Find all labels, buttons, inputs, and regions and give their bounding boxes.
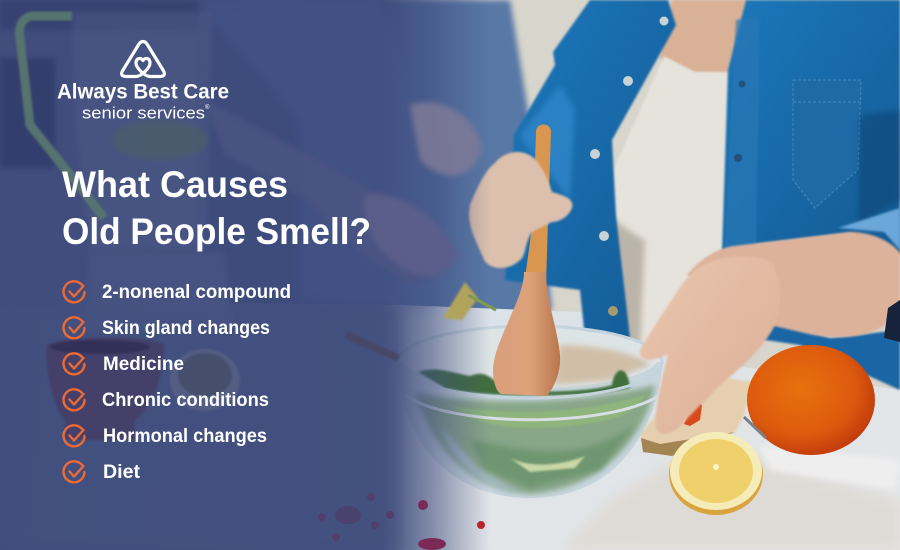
checklist <box>64 281 291 483</box>
sleeve shadow <box>858 110 900 225</box>
logo wordmark: Always Best Care <box>57 80 229 104</box>
logo icon: triangle with heart <box>122 42 164 76</box>
white tank top <box>600 56 730 345</box>
lower rim band <box>405 395 660 420</box>
logo <box>57 42 229 122</box>
item: chronic conditions: Chronic conditions <box>102 390 269 411</box>
item: medicine <box>64 353 184 375</box>
forearm and right hand <box>640 232 900 434</box>
tank top shadow <box>613 218 645 345</box>
pale salad strip <box>510 456 585 472</box>
second person's shirt tint <box>195 0 450 310</box>
knife on counter <box>346 335 398 358</box>
blue glass lower left <box>440 425 520 492</box>
herb stem <box>468 295 496 310</box>
item: medicine: Medicine <box>103 354 184 375</box>
title <box>62 164 371 252</box>
counter <box>0 300 900 550</box>
tomato pieces <box>684 400 702 426</box>
board edge <box>641 432 735 456</box>
main person <box>505 0 900 390</box>
right shirt panel <box>722 0 900 255</box>
bowl contents <box>50 340 150 354</box>
orange <box>747 345 875 455</box>
logo tagline: senior services <box>82 104 205 122</box>
interior tint <box>555 345 650 385</box>
cutting board <box>640 372 752 456</box>
item: 2-nonenal compound: 2-nonenal compound <box>102 282 291 303</box>
left shirt panel <box>505 0 676 338</box>
salad bowl <box>397 326 663 498</box>
knife clip <box>744 417 766 438</box>
item: diet <box>64 461 141 483</box>
wooden spoon <box>493 124 560 396</box>
registered mark: ® <box>205 104 210 111</box>
blender jar <box>72 12 212 250</box>
background panel <box>0 58 55 168</box>
item: skin gland changes: Skin gland changes <box>102 318 270 339</box>
background shelf <box>0 0 200 30</box>
upper hand in overlay <box>410 102 482 176</box>
lower shirt behind arm <box>730 320 900 390</box>
hand <box>640 256 781 434</box>
orange flesh <box>178 353 232 397</box>
blender base <box>85 252 232 330</box>
lemon <box>669 432 763 515</box>
blender handle <box>20 16 104 218</box>
herb slice <box>443 282 478 320</box>
rolled cuff <box>838 208 900 250</box>
person's hand in overlay <box>365 194 458 277</box>
halved orange <box>170 349 240 411</box>
top greens <box>418 369 630 396</box>
blender contents <box>112 120 208 160</box>
left hand holding spoon <box>469 152 572 268</box>
item: hormonal changes: Hormonal changes <box>103 426 267 447</box>
salad inside bowl <box>415 385 655 494</box>
left shirt light fold <box>520 85 575 200</box>
person's arm <box>205 100 440 285</box>
button placket <box>724 15 760 250</box>
counter tint <box>0 305 400 550</box>
second person's shirt <box>200 0 552 330</box>
item: diet: Diet <box>103 462 141 483</box>
pocket flap seam <box>793 101 861 103</box>
neck and chest <box>660 0 748 74</box>
spoon head <box>493 272 560 396</box>
spoon handle <box>524 124 551 285</box>
scattered berries <box>318 493 485 550</box>
wooden bowl <box>46 338 164 440</box>
bowl body <box>397 362 663 498</box>
shirt buttons <box>590 16 746 316</box>
bowl interior <box>402 328 658 388</box>
title: Old People Smell? <box>62 211 371 252</box>
dark salad detail <box>470 425 635 488</box>
shirt pocket <box>793 80 861 208</box>
navy overlay <box>0 0 490 550</box>
sheet on the counter <box>760 445 900 490</box>
bowl rim <box>398 326 662 398</box>
title: What Causes <box>62 164 288 205</box>
mid salad band <box>450 395 645 428</box>
dark gap at arm end <box>884 300 900 342</box>
counter warm tone <box>560 445 900 550</box>
blurred background objects under overlay <box>0 0 496 550</box>
forearm <box>687 232 900 337</box>
